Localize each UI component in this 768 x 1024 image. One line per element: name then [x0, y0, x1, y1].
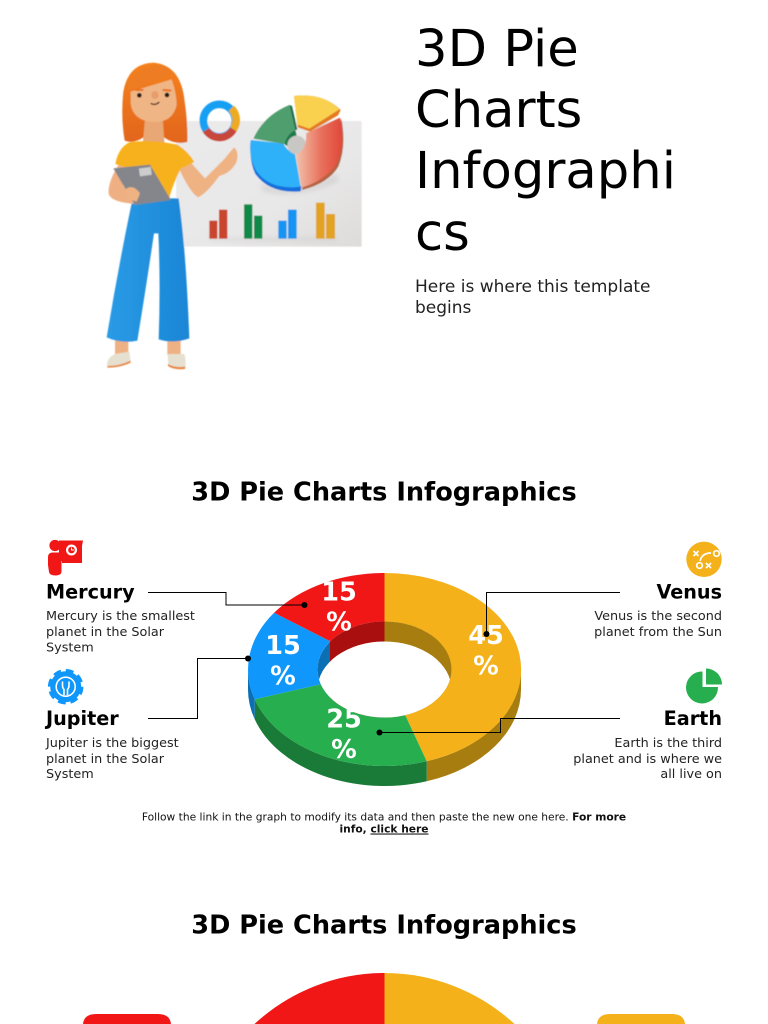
- subtitle: Here is where this template: [415, 277, 650, 297]
- subtitle: begins: [415, 298, 472, 318]
- Mercury description: [46, 609, 195, 656]
- section heading: 3D Pie Charts Infographics: [191, 478, 577, 508]
- second pie chart: top portion: [254, 973, 514, 1024]
- Earth label: Earth: [664, 707, 722, 730]
- presentation board: [176, 121, 362, 247]
- tablet camera: [139, 167, 152, 176]
- icon: Venus strategy: [686, 542, 722, 577]
- woman figure: [107, 63, 238, 369]
- tablet: [113, 165, 171, 205]
- fingers: [125, 187, 140, 202]
- icon: Mercury presenter: [48, 540, 83, 576]
- Earth description: [573, 736, 722, 782]
- side wall: blue: [248, 670, 255, 719]
- icon: Earth pie: [686, 668, 722, 703]
- bar chart: yellow: [316, 203, 335, 239]
- leader line: Earth: [376, 718, 620, 736]
- leader line: Venus: [484, 592, 620, 637]
- shirt: [115, 141, 194, 197]
- second section heading: 3D Pie Charts Infographics: [191, 910, 577, 940]
- slice: green 25: [255, 684, 427, 766]
- value labels: %: [331, 735, 357, 765]
- Mercury label: Mercury: [46, 580, 135, 604]
- slice: red: [254, 973, 384, 1024]
- Jupiter description: System: [46, 767, 94, 782]
- icon: Jupiter gear and wrench: [50, 671, 81, 702]
- badge: red: [83, 1014, 171, 1024]
- value labels: 15: [321, 578, 357, 608]
- board shadows: [208, 173, 338, 241]
- slice: yellow: [384, 973, 514, 1024]
- footnote: Follow the link in the graph to modify its data and then paste the new one here. For more: [142, 810, 626, 824]
- bar chart: green: [244, 204, 262, 239]
- bar chart: red: [209, 210, 227, 239]
- title: cs: [415, 203, 470, 263]
- title: Infographi: [415, 141, 676, 201]
- illustration: woman presenting charts: [107, 63, 362, 369]
- Mercury description: planet in the Solar: [46, 625, 165, 640]
- Jupiter description: planet in the Solar: [46, 752, 165, 767]
- small donut chart: [203, 104, 236, 138]
- Venus description: Venus is the second: [594, 609, 722, 624]
- side wall: yellow: [427, 670, 521, 781]
- Jupiter description: [45, 736, 179, 782]
- footnote: info, click here: [339, 822, 429, 836]
- Mercury description: System: [46, 640, 94, 656]
- Jupiter label: Jupiter: [44, 707, 119, 730]
- arm left: [109, 165, 140, 204]
- title: [415, 19, 676, 263]
- Venus description: [594, 609, 722, 640]
- title: 3D Pie: [415, 19, 579, 79]
- legs and shoes: [107, 340, 186, 369]
- leader line: Mercury: [148, 592, 308, 608]
- Earth description: all live on: [660, 767, 722, 782]
- value labels: %: [326, 608, 352, 638]
- slice: yellow 45: [384, 573, 521, 761]
- value labels: 45: [468, 621, 504, 651]
- slice: blue 15: [248, 613, 330, 699]
- badge: yellow: [597, 1014, 685, 1024]
- value labels: 25: [326, 704, 362, 734]
- trousers: [107, 198, 189, 342]
- 3D pie on board: [250, 95, 343, 192]
- arm right: [177, 147, 238, 197]
- donut chart: 3D pie with four slices: [248, 573, 521, 786]
- neck and face: [143, 118, 165, 145]
- bar chart: blue: [278, 210, 297, 239]
- value labels: 15: [265, 631, 301, 661]
- value labels: [265, 578, 504, 765]
- footnote: [142, 810, 626, 836]
- leader line: Jupiter: [148, 656, 251, 718]
- Earth description: Earth is the third: [614, 736, 722, 751]
- eyes and mouth: [135, 90, 171, 104]
- subtitle: [415, 277, 650, 318]
- Mercury description: Mercury is the smallest: [46, 609, 195, 624]
- fringe: [127, 65, 172, 91]
- title: Charts: [415, 80, 582, 140]
- Earth description: planet and is where we: [573, 752, 722, 767]
- slice: red 15: [274, 573, 384, 641]
- value labels: %: [473, 652, 499, 682]
- Jupiter description: Jupiter is the biggest: [45, 736, 179, 751]
- inner walls: [318, 622, 452, 718]
- Venus label: Venus: [656, 580, 722, 604]
- side wall: green: [255, 699, 427, 786]
- value labels: %: [270, 662, 296, 692]
- Venus description: planet from the Sun: [594, 625, 722, 640]
- hair back: [122, 63, 187, 143]
